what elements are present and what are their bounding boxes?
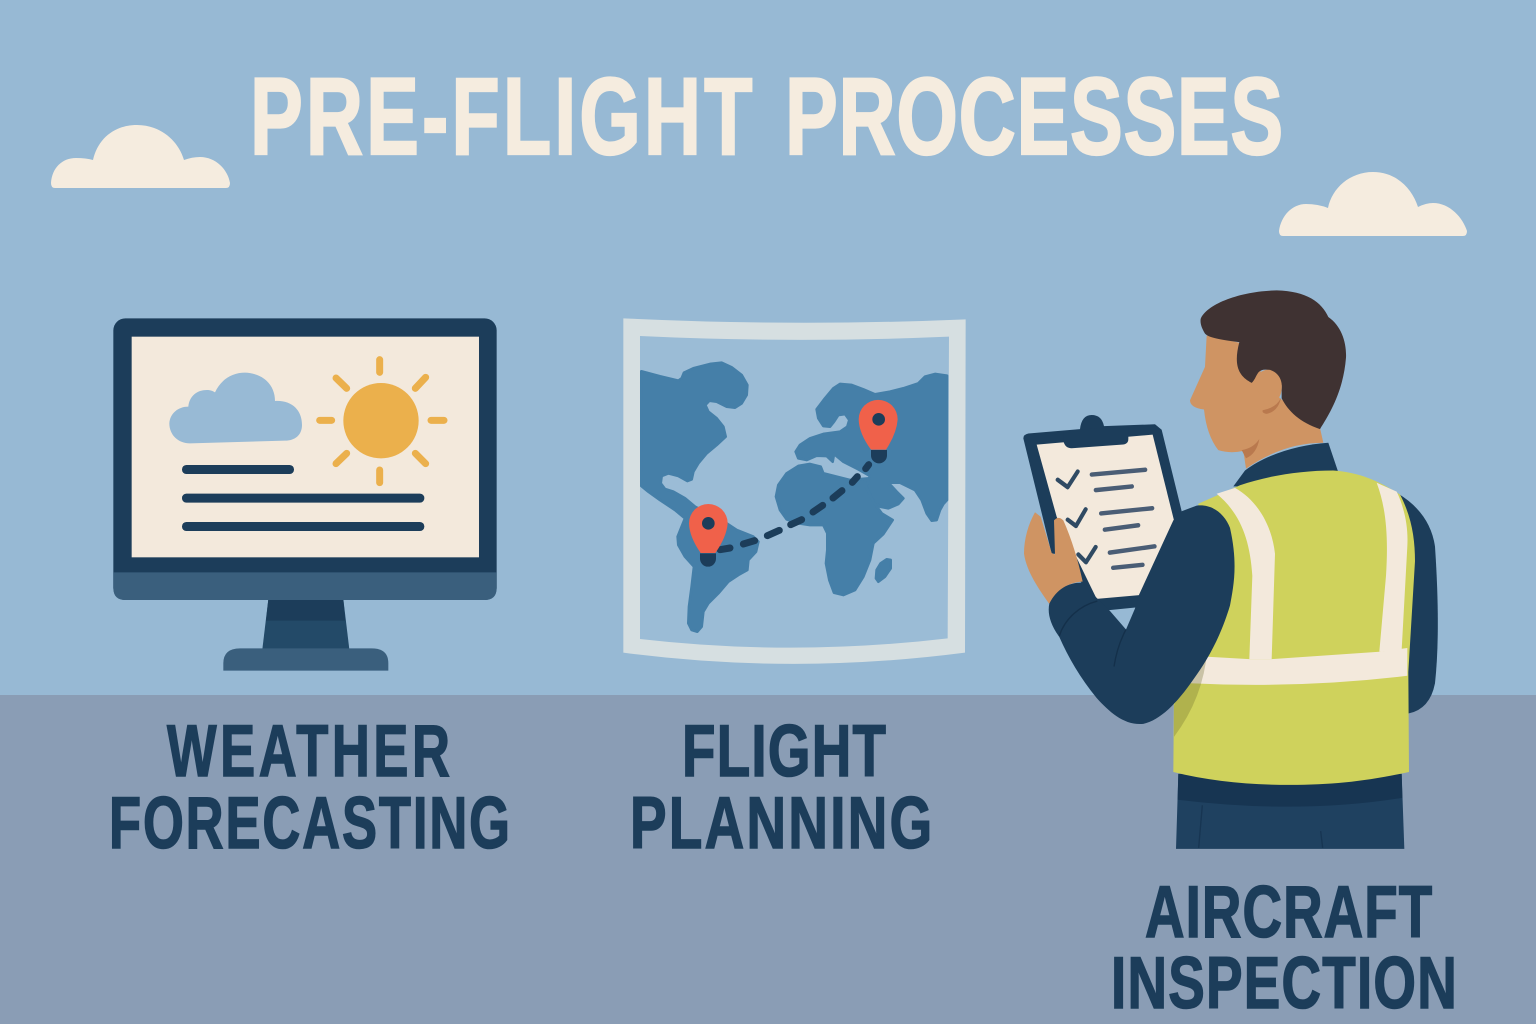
icon: destination pin <box>859 400 898 463</box>
collar <box>1233 443 1338 487</box>
label: flight planning: FLIGHT <box>682 710 886 792</box>
icon: weather monitor <box>113 318 497 671</box>
vest reflective stripes <box>1190 483 1408 685</box>
label: aircraft inspection: INSPECTION <box>1111 942 1457 1024</box>
clipboard <box>1023 415 1182 610</box>
map land masses <box>641 363 947 632</box>
map sea <box>640 336 949 648</box>
ear <box>1254 370 1282 414</box>
label: flight planning <box>630 710 932 864</box>
checkmarks <box>1058 472 1096 562</box>
monitor body <box>113 318 497 600</box>
clipboard clip <box>1063 426 1128 448</box>
forecast text lines <box>182 465 424 531</box>
near arm <box>1049 505 1235 724</box>
ground band <box>0 695 1536 1024</box>
checklist lines <box>1092 470 1155 568</box>
icon: left cloud <box>51 125 230 188</box>
title: PROCESSES <box>785 55 1283 178</box>
icon: sun <box>320 360 444 483</box>
far arm <box>1398 494 1438 714</box>
dashed flight route <box>720 465 869 550</box>
title <box>250 55 1283 178</box>
icon: right cloud <box>1279 172 1467 236</box>
sky background <box>0 0 1536 696</box>
label: weather forecasting: WEATHER <box>167 711 450 792</box>
icon: cloud on screen <box>169 373 302 443</box>
label: aircraft inspection <box>1111 871 1457 1024</box>
map frame <box>623 318 966 664</box>
monitor screen <box>132 337 479 557</box>
trousers <box>1176 774 1404 849</box>
label: flight planning: PLANNING <box>630 782 932 864</box>
label: aircraft inspection: AIRCRAFT <box>1145 871 1432 953</box>
hand <box>1024 512 1083 605</box>
head <box>1190 335 1323 469</box>
clipboard paper <box>1037 435 1174 599</box>
label: weather forecasting: FORECASTING <box>109 783 510 864</box>
hair <box>1201 290 1346 429</box>
label: weather forecasting <box>109 711 510 864</box>
safety vest <box>1173 470 1415 785</box>
title: PRE-FLIGHT <box>250 55 753 178</box>
icon: origin pin <box>689 504 728 567</box>
icon: world map <box>623 318 966 664</box>
icon: inspector with clipboard <box>1023 290 1438 849</box>
monitor stand <box>223 599 388 671</box>
